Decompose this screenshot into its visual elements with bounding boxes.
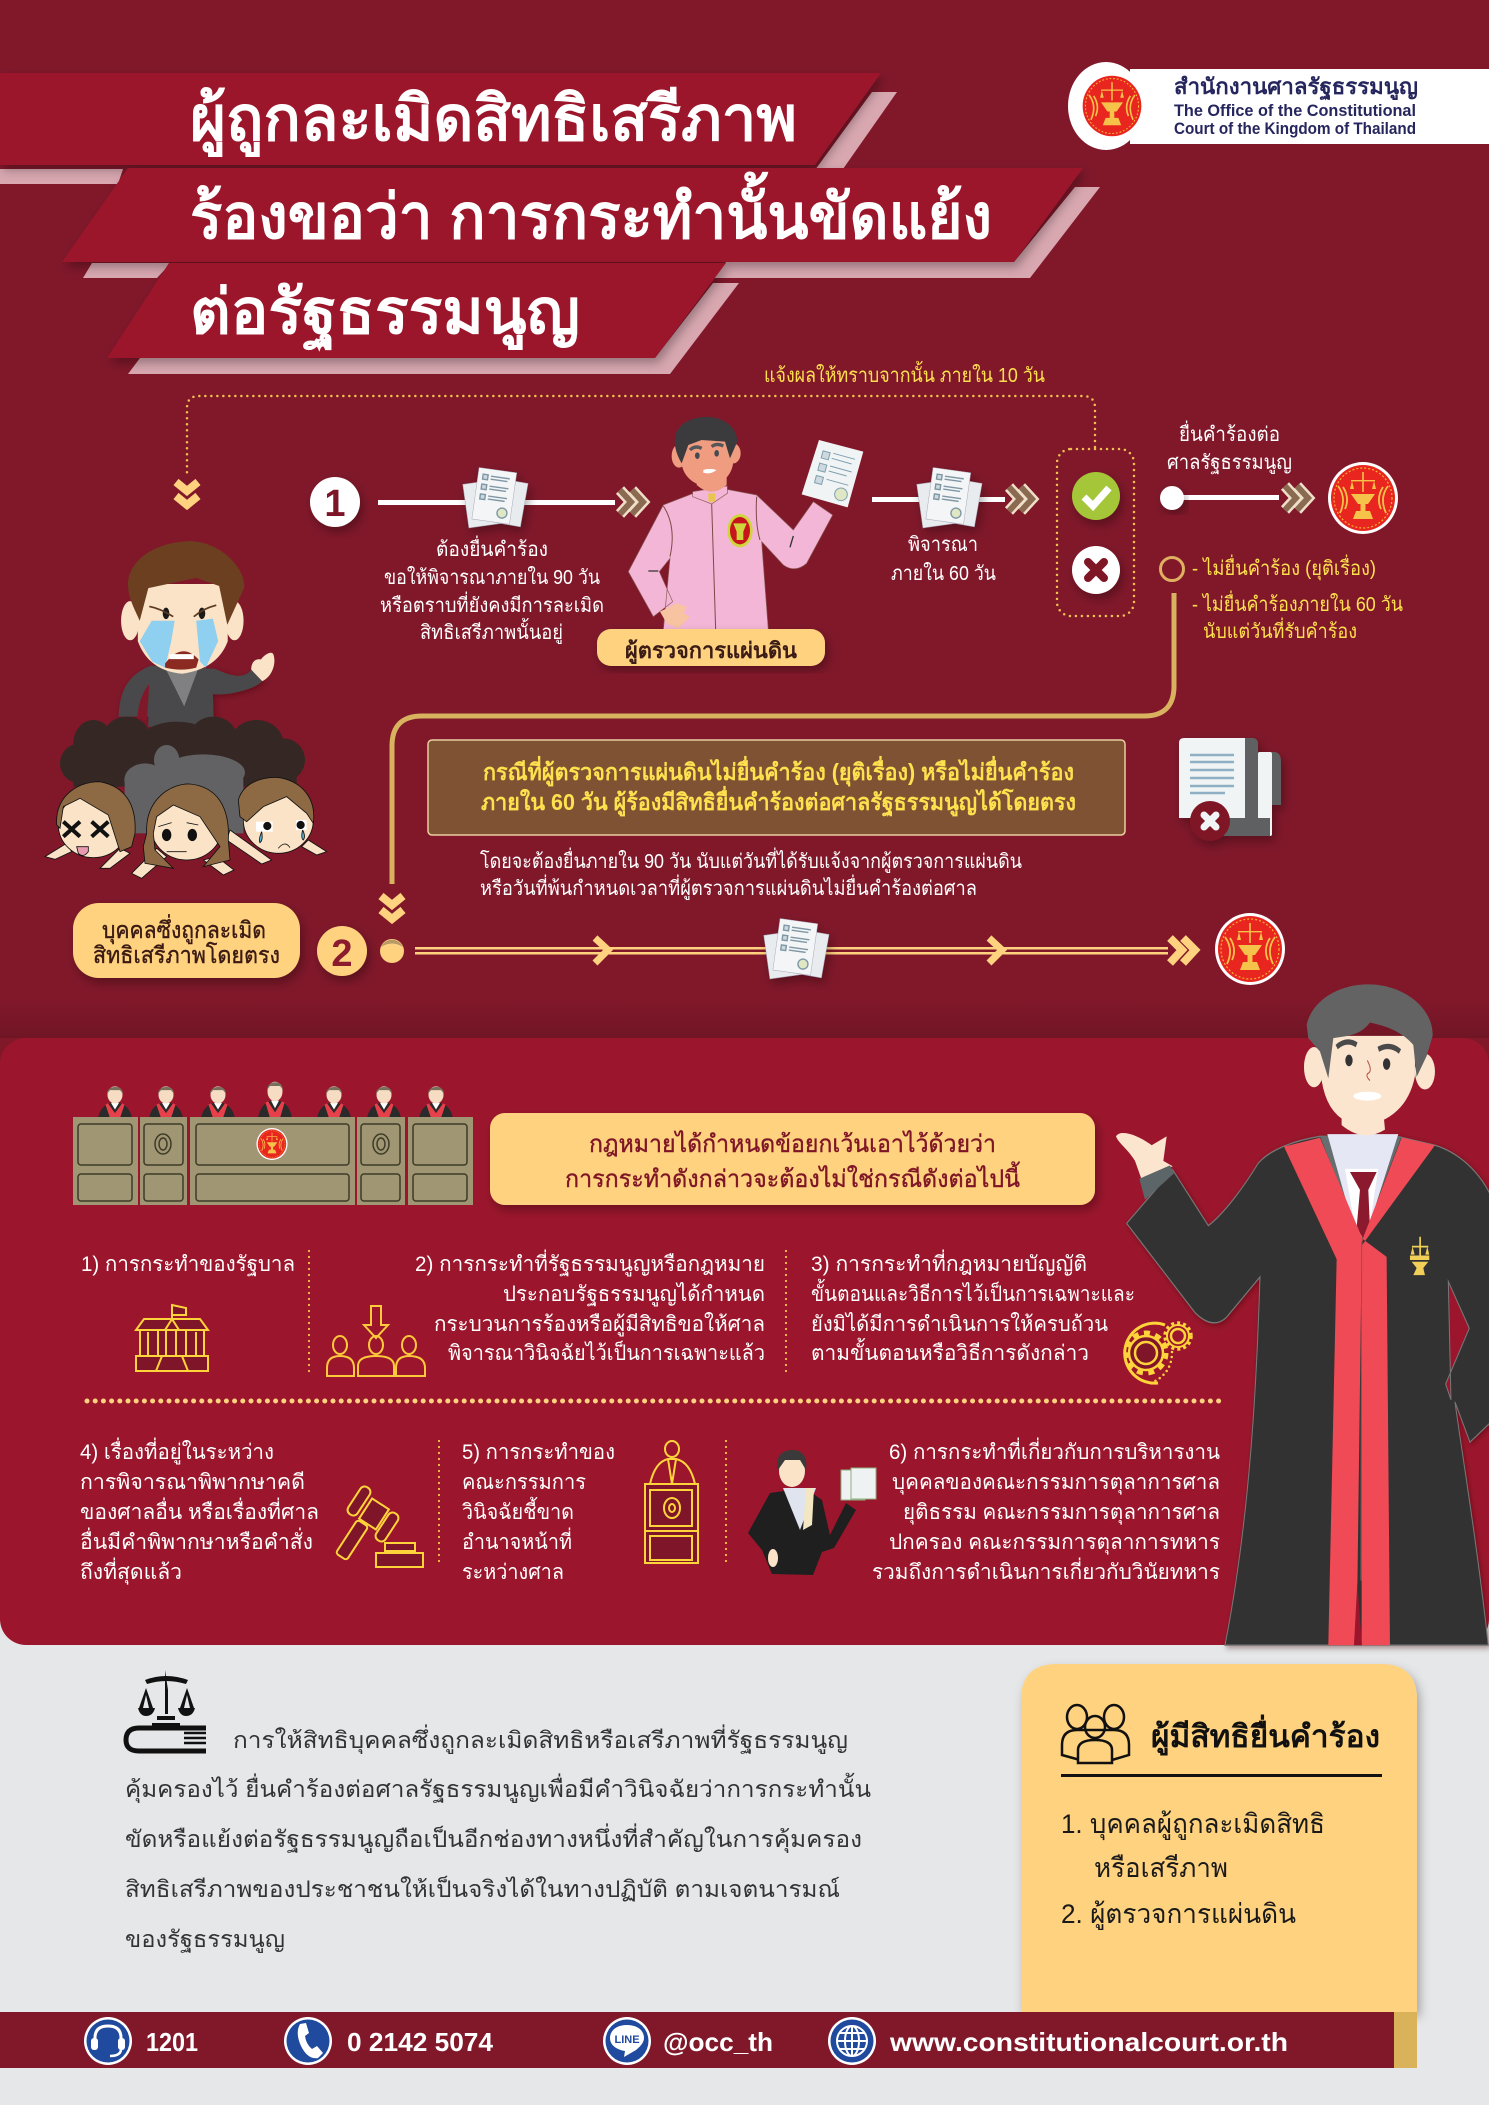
- branch: does not file: - ไม่ยื่นคำร้องภายใน 60 วัน: [1192, 590, 1403, 616]
- exception 3: ยังมิได้มีการดำเนินการให้ครบถ้วน: [811, 1312, 1108, 1336]
- exception 4: 4) เรื่องที่อยู่ในระหว่าง: [80, 1437, 274, 1465]
- hotline number: 1201: [146, 2027, 198, 2057]
- exception 5: ระหว่างศาล: [462, 1561, 564, 1584]
- exception 1: [81, 1253, 295, 1371]
- title text line 1: ผู้ถูกละเมิดสิทธิเสรีภาพ: [190, 85, 797, 157]
- icon: line app: LINE: [614, 2034, 640, 2046]
- exception 6: 6) การกระทำที่เกี่ยวกับการบริหารงาน: [889, 1437, 1220, 1464]
- exception 3: ขั้นตอนและวิธีการไว้เป็นการเฉพาะและ: [811, 1279, 1135, 1306]
- icon: gavel: [336, 1485, 423, 1567]
- icon: government building: [136, 1305, 208, 1371]
- step 1 description: ต้องยื่นคำร้อง: [436, 535, 548, 561]
- red stripes: [1284, 1138, 1363, 1645]
- exception 3: ตามขั้นตอนหรือวิธีการดังกล่าว: [811, 1338, 1089, 1365]
- step 1 description: สิทธิเสรีภาพนั้นอยู่: [420, 618, 563, 645]
- icon: people with arrow: [327, 1306, 425, 1376]
- man torso: [119, 666, 263, 727]
- exception 4: การพิจารณาพิพากษาคดี: [80, 1471, 305, 1494]
- label: directly affected person: บุคคลซึ่งถูกละเมิด: [102, 914, 266, 944]
- exception 2: พิจารณาวินิจฉัยไว้เป็นการเฉพาะแล้ว: [448, 1339, 765, 1365]
- step 2 badge: 2: [331, 933, 353, 975]
- dark cloud: [60, 717, 305, 787]
- exception 1: 1) การกระทำของรัฐบาล: [81, 1253, 295, 1276]
- illustration: crying man with dark cloud and three women: [45, 541, 327, 878]
- connector to step 2: [381, 593, 1174, 919]
- paragraph: right to petition: [125, 1724, 871, 1953]
- label: directly affected person: [73, 903, 300, 978]
- exception 3: [811, 1249, 1191, 1383]
- step 1 badge: 1: [324, 483, 346, 525]
- grey cloud: [124, 745, 245, 833]
- notification note: 10 days: แจ้งผลให้ทราบจากนั้น ภายใน 10 วัน: [764, 361, 1045, 387]
- list: [1061, 1809, 1325, 1930]
- exception 6: ยุติธรรม คณะกรรมการตุลาการศาล: [903, 1501, 1220, 1525]
- branch: does not file: [1160, 554, 1403, 643]
- label: ombudsman: ผู้ตรวจการแผ่นดิน: [625, 638, 797, 665]
- title text line 3: ต่อรัฐธรรมนูญ: [190, 278, 580, 352]
- illustration: ombudsman in pink uniform: [628, 417, 863, 630]
- panel: who may petition: [1021, 1664, 1417, 2012]
- shirt and collar: [1320, 1136, 1402, 1241]
- exception 5: 5) การกระทำของ: [462, 1441, 615, 1464]
- icon: hotline headset: [84, 2017, 132, 2065]
- woman left: [45, 782, 135, 868]
- line account: @occ_th: [663, 2027, 773, 2057]
- paragraph: right to petition: คุ้มครองไว้ ยื่นคำร้องต่อศาลรัฐธรรมนูญเพื่อมีคำวินิจฉัยว่าการกระทำนั้น: [125, 1773, 871, 1803]
- text: consider within 60 days: ภายใน 60 วัน: [891, 562, 996, 585]
- branch: does not file: - ไม่ยื่นคำร้อง (ยุติเรื่อง): [1192, 554, 1376, 581]
- label: ombudsman: [597, 629, 825, 666]
- icon: gears: [1125, 1323, 1191, 1383]
- badge: [1410, 1237, 1429, 1275]
- neck and face: [1342, 1112, 1385, 1135]
- robe: [1127, 1136, 1489, 1645]
- step 1 arrow with documents: [378, 467, 643, 528]
- exception 2: กระบวนการร้องหรือผู้มีสิทธิขอให้ศาล: [434, 1312, 765, 1337]
- title text line 2: ร้องขอว่า การกระทำนั้นขัดแย้ง: [190, 171, 992, 252]
- exception 6: รวมถึงการดำเนินการเกี่ยวกับวินัยทหาร: [872, 1557, 1220, 1584]
- branch: does not file: นับแต่วันที่รับคำร้อง: [1203, 617, 1357, 643]
- illustration: large judge in robe: [1116, 984, 1489, 1645]
- paper in hand: [802, 440, 863, 507]
- step 1 description: หรือตราบที่ยังคงมีการละเมิด: [380, 591, 604, 617]
- paragraph: right to petition: การให้สิทธิบุคคลซึ่งถูกละเมิดสิทธิหรือเสรีภาพที่รัฐธรรมนูญ: [233, 1724, 848, 1754]
- branch: file to constitutional court: ศาลรัฐธรรมนูญ: [1167, 452, 1292, 475]
- footer: contact bar: [0, 2012, 1417, 2068]
- list: 1. บุคคลผู้ถูกละเมิดสิทธิ: [1061, 1809, 1325, 1841]
- heading: ผู้มีสิทธิยื่นคำร้อง: [1151, 1714, 1380, 1756]
- branch: file to constitutional court: [1160, 420, 1398, 534]
- step 1 description: [380, 535, 604, 645]
- note: filing within 90 days: [480, 847, 1022, 901]
- exception 6: [748, 1437, 1220, 1584]
- step 2 badge: [317, 926, 367, 976]
- note: filing within 90 days: หรือวันที่พ้นกำหนดเวลาที่ผู้ตรวจการแผ่นดินไม่ยื่นคำร้องต่อศาล: [480, 874, 977, 901]
- exception 4: [80, 1437, 423, 1585]
- text: consider within 60 days: [891, 534, 996, 585]
- exception 5: คณะกรรมการ: [462, 1471, 586, 1494]
- branch: file to constitutional court: ยื่นคำร้องต่อ: [1179, 420, 1280, 446]
- exception 4: ถึงที่สุดแล้ว: [80, 1557, 182, 1585]
- callout: direct right to petition: ภายใน 60 วัน ผู้ร้องมีสิทธิยื่นคำร้องต่อศาลรัฐธรรมนูญได้โดยตรง: [481, 785, 1076, 817]
- icon: scales on book: [126, 1670, 206, 1751]
- website: www.constitutionalcourt.or.th: [889, 2027, 1288, 2057]
- raised hand: [1116, 1133, 1173, 1180]
- icon: globe: [828, 2017, 876, 2065]
- panel: exceptions: [0, 1038, 1489, 1645]
- label: directly affected person: สิทธิเสรีภาพโดยตรง: [93, 942, 280, 968]
- decision box: accept or reject: [1057, 449, 1134, 616]
- exception 6: ปกครอง คณะกรรมการตุลาการทหาร: [889, 1531, 1220, 1555]
- callout: exceptions heading: [490, 1113, 1095, 1205]
- exception 6: บุคคลของคณะกรรมการตุลาการศาล: [892, 1471, 1220, 1495]
- list: หรือเสรีภาพ: [1094, 1853, 1228, 1883]
- callout: exceptions heading: กฎหมายได้กำหนดข้อยกเว้นเอาไว้ด้วยว่า: [589, 1130, 996, 1158]
- paragraph: right to petition: สิทธิเสรีภาพของประชาชนให้เป็นจริงได้ในทางปฏิบัติ ตามเจตนารมณ์: [125, 1874, 840, 1902]
- step 1 description: ขอให้พิจารณาภายใน 90 วัน: [384, 566, 600, 589]
- woman middle: [132, 784, 234, 878]
- logo: office of the constitutional court: The Office of the Constitutional: [1174, 101, 1416, 120]
- dotted column dividers: [309, 1251, 786, 1566]
- icon: people with question marks: [1062, 1705, 1129, 1763]
- paragraph: right to petition: ของรัฐธรรมนูญ: [125, 1926, 285, 1953]
- woman right: [227, 777, 327, 864]
- exception 4: ของศาลอื่น หรือเรื่องที่ศาล: [80, 1497, 319, 1524]
- arrow: consider within 60 days: [872, 467, 1032, 528]
- exception 2: [327, 1249, 765, 1376]
- note: filing within 90 days: โดยจะต้องยื่นภายใน 90 วัน นับแต่วันที่ได้รับแจ้งจากผู้ตรวจการแผ่นดิน: [480, 847, 1022, 874]
- exception 5: อำนาจหน้าที่: [462, 1527, 572, 1554]
- callout: direct right to petition: กรณีที่ผู้ตรวจการแผ่นดินไม่ยื่นคำร้อง (ยุติเรื่อง) หรือไม่ยื่นคำร้อง: [483, 755, 1074, 787]
- callout: direct right to petition: [428, 740, 1125, 835]
- dotted feedback arrow: [176, 396, 1095, 505]
- callout: exceptions heading: การกระทำดังกล่าวจะต้องไม่ใช่กรณีดังต่อไปนี้: [565, 1161, 1020, 1193]
- exception 5: วินิจฉัยชี้ขาด: [462, 1497, 574, 1524]
- hair: [1307, 984, 1433, 1078]
- logo: office of the constitutional court: [1068, 62, 1489, 150]
- icon: rejected document: [1179, 738, 1285, 841]
- exception 2: ประกอบรัฐธรรมนูญได้กำหนด: [503, 1282, 765, 1307]
- icon: line app: [603, 2017, 651, 2065]
- exception 4: อื่นมีคำพิพากษาหรือคำสั่ง: [80, 1527, 313, 1554]
- title banners: [0, 73, 1100, 374]
- illustration: judge holding documents: [748, 1450, 876, 1575]
- telephone number: 0 2142 5074: [347, 2027, 494, 2057]
- logo: office of the constitutional court: สำนักงานศาลรัฐธรรมนูญ: [1174, 74, 1418, 101]
- list: 2. ผู้ตรวจการแผ่นดิน: [1061, 1899, 1296, 1930]
- text: consider within 60 days: พิจารณา: [908, 534, 978, 556]
- step 2 arrow to court: [380, 913, 1285, 985]
- logo: office of the constitutional court: Court of the Kingdom of Thailand: [1174, 119, 1416, 138]
- exception 3: 3) การกระทำที่กฎหมายบัญญัติ: [811, 1249, 1087, 1276]
- icon: telephone: [284, 2017, 332, 2065]
- exception 5: [462, 1441, 698, 1584]
- icon: judge at podium: [645, 1441, 698, 1563]
- illustration: bench of judges: [73, 1082, 473, 1205]
- man hair: [128, 541, 244, 625]
- exception 2: 2) การกระทำที่รัฐธรรมนูญหรือกฎหมาย: [415, 1249, 765, 1277]
- paragraph: right to petition: ขัดหรือแย้งต่อรัฐธรรมนูญถือเป็นอีกช่องทางหนึ่งที่สำคัญในการคุ้มครอง: [125, 1823, 862, 1853]
- step 1 badge: [310, 477, 360, 527]
